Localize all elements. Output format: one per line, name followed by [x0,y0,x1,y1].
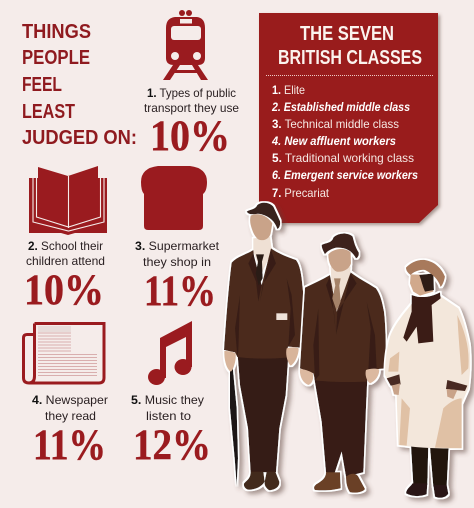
value: 11%: 11% [33,422,106,469]
panel background [259,13,438,223]
label: music [131,393,204,423]
label: supermarket: they shop in [143,255,211,269]
icon: book [29,166,107,235]
item 4: newspaper [24,324,108,469]
shoes [314,472,365,493]
trousers [238,355,288,472]
face [410,274,433,296]
scarf [403,292,441,343]
class list: 7. Precariat [272,186,330,200]
hat [322,234,359,258]
heading: PEOPLE [22,47,90,69]
item 5: music [131,321,211,469]
pocket square [276,313,287,320]
label: school: children attend [26,254,105,268]
label: transport: transport they use [144,101,239,115]
heading: THINGS [22,21,91,43]
item 3: supermarket [135,166,220,315]
figure: tall man in bowler hat [224,203,304,490]
class list: 1. Elite [272,83,305,97]
label: newspaper: they read [45,409,96,423]
class list: 5. Traditional working class [272,151,414,165]
jacket [300,272,386,382]
heading [22,21,137,149]
value: 11%: 11% [144,268,216,315]
shoes [244,472,279,490]
hands [300,369,379,385]
hat [247,203,280,229]
value: 12%: 12% [133,422,211,469]
label: newspaper [32,393,108,423]
label: supermarket: 3. Supermarket [135,239,220,253]
icon: train [163,10,208,80]
label: transport: 1. Types of public [147,86,236,100]
class list: 6. Emergent service workers [272,168,418,182]
item 2: school [24,166,107,314]
icon: newspaper [24,324,104,383]
figures: three men [224,203,470,498]
panel title: THE SEVEN [300,23,394,45]
hands [224,347,299,372]
figure: short man in flat cap [385,260,470,498]
label: school: 2. School their [28,239,103,253]
label: transport [144,86,239,115]
class list: 2. Established middle class [271,100,410,114]
value: 10%: 10% [150,113,230,160]
face [328,249,351,272]
value: 10%: 10% [24,267,104,314]
panel: the seven British classes [259,13,438,223]
coat [385,296,470,448]
heading: LEAST [22,101,75,123]
class list: 3. Technical middle class [272,117,399,131]
trousers [314,378,367,477]
umbrella [230,367,238,486]
label: newspaper: 4. Newspaper [32,393,108,407]
shoes [406,483,448,498]
figure: stout man in trilby [300,234,386,493]
heading: FEEL [22,74,62,96]
legs [411,445,449,487]
panel title: BRITISH CLASSES [278,47,422,69]
lapel shading [235,250,295,357]
panel title [278,23,422,69]
neck and shirt [331,267,351,308]
jacket [224,248,304,359]
shirt and neck [253,237,272,273]
cuffs [387,374,467,391]
face [250,214,272,240]
lapel shading [313,274,377,380]
class list [271,83,418,200]
tie [332,278,341,311]
cap [406,260,445,287]
item 1: public transport [144,10,239,160]
coat shading [388,315,469,448]
icon: music note [148,321,192,385]
tie [256,254,264,286]
label: school [26,239,105,268]
label: supermarket [135,239,220,269]
class list: 4. New affluent workers [271,134,396,148]
hands [392,383,457,399]
hair [419,273,434,292]
label: music: 5. Music they [131,393,204,407]
icon: bread [141,166,207,230]
heading: JUDGED ON: [22,127,137,149]
label: music: listen to [146,409,191,423]
